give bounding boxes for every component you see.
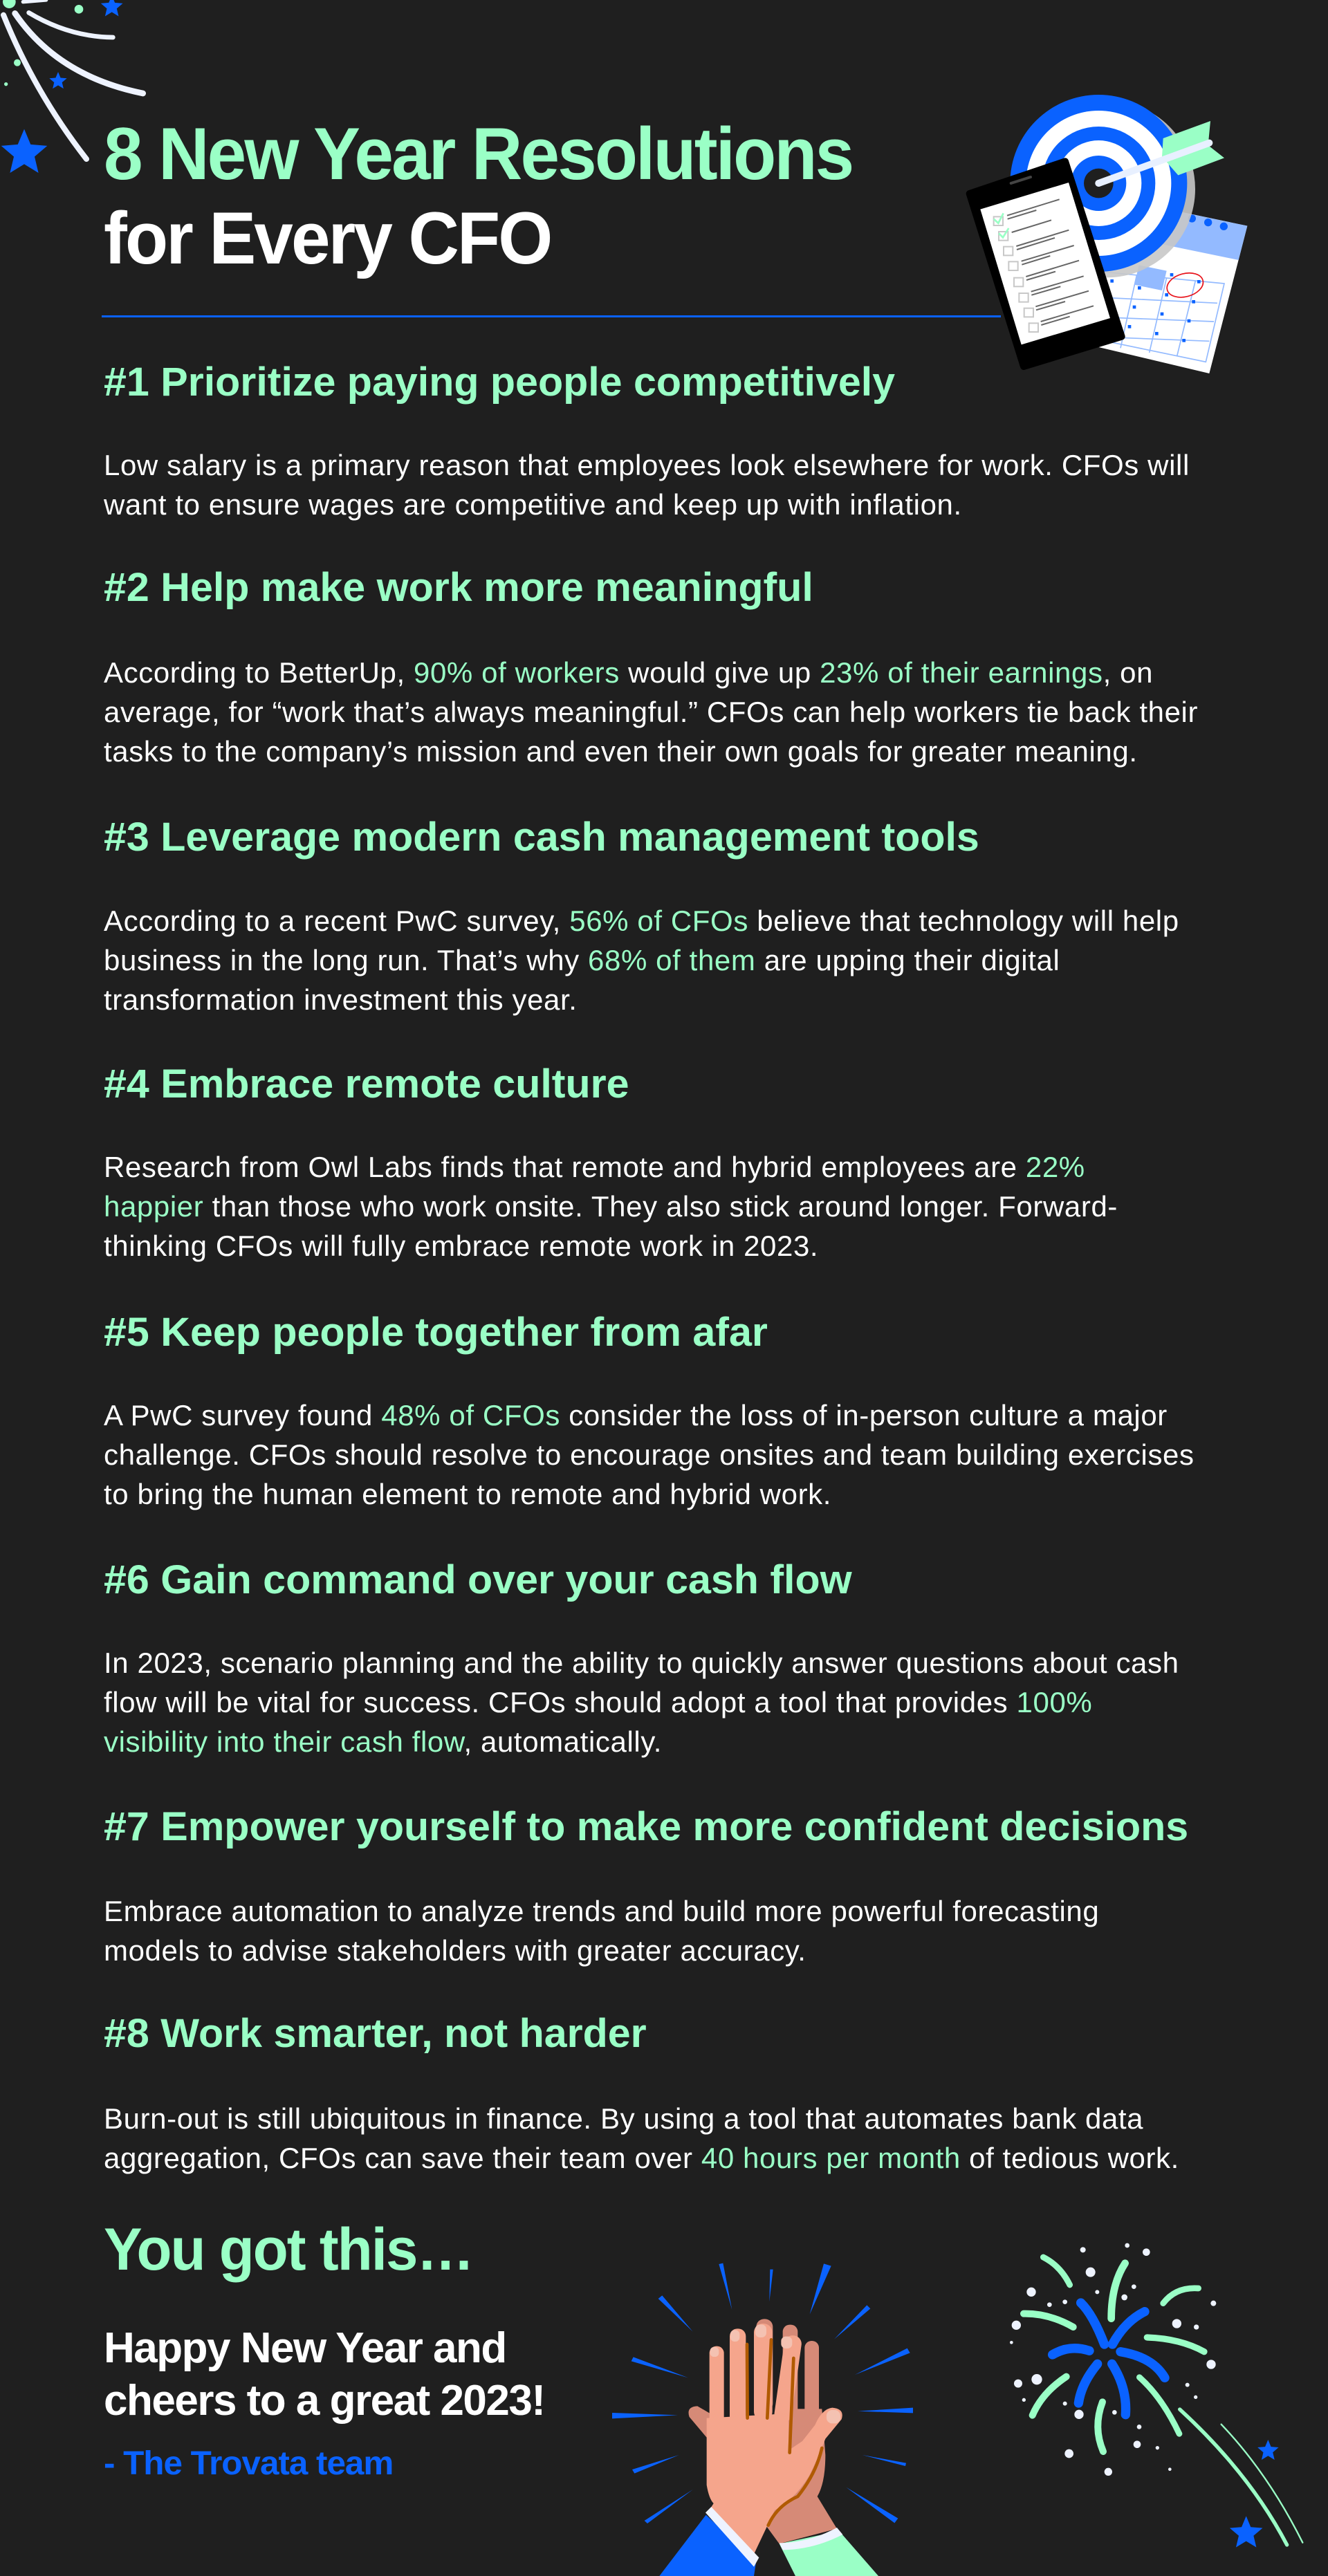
title: for Every CFO: [104, 196, 551, 279]
text #2: average, for “work that’s always meaningful.” CFOs can help workers tie back their: [104, 696, 1198, 728]
illustration: high five: [612, 2263, 913, 2576]
text #2: According to BetterUp, 90% of workers would give up 23% of their earnings, on: [104, 656, 1153, 689]
text #8: Burn-out is still ubiquitous in finance. By using a tool that automates bank data: [104, 2102, 1143, 2135]
text #3: business in the long run. That’s why 68% of them are upping their digital: [104, 944, 1060, 976]
closing heading: You got this…: [104, 2216, 473, 2283]
text #3: According to a recent PwC survey, 56% of CFOs believe that technology will help: [104, 905, 1179, 937]
heading #2: #2 Help make work more meaningful: [104, 565, 813, 610]
arrow: [1098, 121, 1224, 183]
heading #7: #7 Empower yourself to make more confident decisions: [104, 1804, 1188, 1849]
text #2: tasks to the company’s mission and even their own goals for greater meaning.: [104, 735, 1138, 768]
text #7: Embrace automation to analyze trends and build more powerful forecasting: [104, 1895, 1099, 1927]
text #5: [104, 1399, 1195, 1510]
closing message: [104, 2324, 545, 2425]
text #6: In 2023, scenario planning and the ability to quickly answer questions about cash: [104, 1647, 1179, 1679]
heading #6: #6 Gain command over your cash flow: [104, 1557, 852, 1602]
text #5: to bring the human element to remote and hybrid work.: [104, 1478, 831, 1510]
text #7: [104, 1895, 1099, 1967]
back hand: [689, 2319, 837, 2543]
text #4: thinking CFOs will fully embrace remote work in 2023.: [104, 1230, 818, 1262]
text #1: want to ensure wages are competitive and keep up with inflation.: [104, 488, 962, 521]
closing message: Happy New Year and: [104, 2324, 506, 2372]
title: 8 New Year Resolutions: [104, 112, 852, 195]
text #8: [104, 2102, 1179, 2174]
title: [104, 112, 852, 279]
signature: - The Trovata team: [104, 2445, 393, 2482]
text #5: A PwC survey found 48% of CFOs consider the loss of in-person culture a major: [104, 1399, 1168, 1431]
heading #5: #5 Keep people together from afar: [104, 1310, 768, 1355]
text #6: visibility into their cash flow, automatically.: [104, 1725, 662, 1758]
text #7: models to advise stakeholders with greater accuracy.: [104, 1934, 806, 1967]
text #4: happier than those who work onsite. They also stick around longer. Forward-: [104, 1190, 1118, 1223]
text #3: transformation investment this year.: [104, 983, 578, 1016]
heading #4: #4 Embrace remote culture: [104, 1062, 629, 1106]
text #5: challenge. CFOs should resolve to encourage onsites and team building exercises: [104, 1438, 1195, 1471]
text #2: [104, 656, 1198, 768]
heading #1: #1 Prioritize paying people competitively: [104, 360, 895, 405]
text #4: Research from Owl Labs finds that remote and hybrid employees are 22%: [104, 1151, 1085, 1183]
sleeves: [659, 2507, 878, 2576]
phone: [970, 161, 1122, 367]
decoration: top-left fireworks: [1, 0, 146, 173]
rays: [612, 2263, 913, 2523]
text #3: [104, 905, 1179, 1016]
illustration: target, phone checklist, calendar: [966, 95, 1248, 373]
front hand: [707, 2324, 842, 2554]
target: [1010, 95, 1195, 277]
text #6: [104, 1647, 1179, 1758]
closing message: cheers to a great 2023!: [104, 2377, 545, 2425]
divider: [102, 315, 1001, 317]
text #1: [104, 449, 1190, 521]
heading #8: #8 Work smarter, not harder: [104, 2011, 647, 2056]
text #1: Low salary is a primary reason that employees look elsewhere for work. CFOs will: [104, 449, 1190, 481]
text #6: flow will be vital for success. CFOs should adopt a tool that provides 100%: [104, 1686, 1092, 1718]
illustration: fireworks: [1010, 2243, 1303, 2548]
heading #3: #3 Leverage modern cash management tools: [104, 815, 979, 860]
calendar: [1084, 198, 1247, 373]
text #4: [104, 1151, 1118, 1262]
text #8: aggregation, CFOs can save their team over 40 hours per month of tedious work.: [104, 2142, 1179, 2174]
